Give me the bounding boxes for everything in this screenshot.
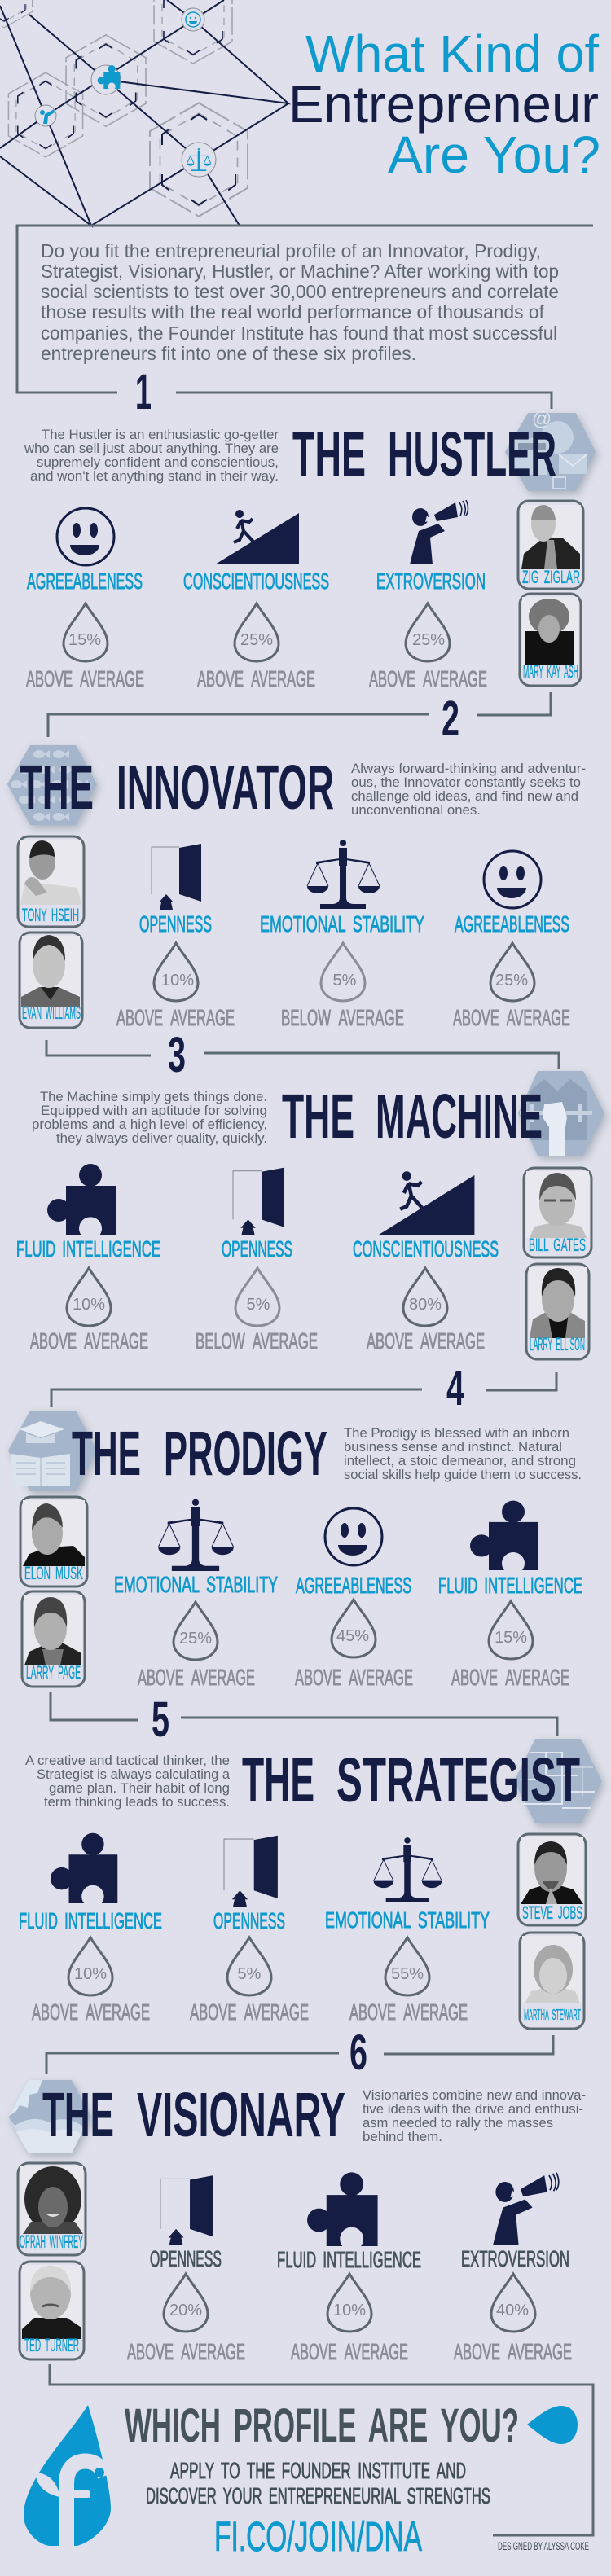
prodigy description: intellect, a stoic demeanor, and strong (344, 1453, 576, 1468)
strategist averages: ABOVE AVERAGE (190, 1999, 309, 2025)
connector 5 (51, 1692, 557, 1736)
number 4: 4 (446, 1360, 464, 1415)
strategist heading: THE (242, 1745, 314, 1815)
prodigy averages: ABOVE AVERAGE (295, 1665, 413, 1690)
hustler averages (26, 666, 487, 691)
innovator averages (116, 1005, 570, 1030)
number 3: 3 (168, 1027, 186, 1082)
visionary trait labels: FLUID INTELLIGENCE (277, 2247, 421, 2272)
machine description: problems and a high level of efficiency, (32, 1117, 267, 1132)
strategist percent drops: 10% (74, 1965, 107, 1983)
machine percent drops: 5% (247, 1296, 270, 1314)
icon: openness (224, 1836, 278, 1907)
machine averages: ABOVE AVERAGE (30, 1328, 148, 1354)
title: What Kind of (306, 24, 599, 83)
hustler percent drops: 25% (240, 631, 273, 649)
intro text: companies, the Founder Institute has found that most successful (41, 323, 557, 344)
hustler percent drops: 25% (412, 631, 445, 649)
intro text: Do you fit the entrepreneurial profile of an Innovator, Prodigy, (41, 240, 541, 261)
portrait: elon musk: ELON MUSK (24, 1563, 83, 1583)
visionary percent drops (164, 2274, 535, 2332)
strategist percent drops (68, 1937, 429, 1995)
machine averages: BELOW AVERAGE (196, 1328, 318, 1354)
hustler percent drops: 15% (68, 631, 101, 649)
visionary heading: VISIONARY (137, 2080, 345, 2150)
strategist averages: ABOVE AVERAGE (32, 1999, 150, 2025)
portrait: mary kay ash (520, 594, 581, 686)
hustler hexagon icon: @ (532, 408, 552, 430)
hustler averages: ABOVE AVERAGE (26, 666, 144, 691)
portrait: steve jobs (518, 1834, 586, 1925)
connector 3 (46, 1040, 559, 1069)
prodigy averages: ABOVE AVERAGE (138, 1665, 255, 1690)
visionary averages (127, 2339, 572, 2364)
icon: openness (233, 1168, 284, 1235)
prodigy trait labels (114, 1572, 582, 1598)
innovator hexagon icon (7, 745, 97, 825)
footer frame (50, 2364, 593, 2535)
icon: fluid intelligence (470, 1501, 538, 1570)
machine description: The Machine simply gets things done. (40, 1089, 267, 1104)
network graphic (0, 0, 288, 226)
icon: extroversion (410, 500, 468, 564)
prodigy percent drops: 45% (336, 1627, 369, 1645)
panel: the machine (16, 1071, 604, 1359)
prodigy percent drops (174, 1600, 533, 1660)
portrait: tony hseih (18, 836, 84, 927)
prodigy heading: PRODIGY (164, 1419, 327, 1489)
innovator averages: ABOVE AVERAGE (116, 1005, 235, 1030)
strategist percent drops: 5% (238, 1965, 262, 1983)
icon: conscientiousness (215, 510, 299, 564)
strategist description: A creative and tactical thinker, the (25, 1753, 230, 1768)
footer call to action (146, 2458, 490, 2508)
prodigy trait labels: AGREEABLENESS (296, 1573, 411, 1598)
hustler hexagon icon (505, 408, 596, 491)
strategist percent drops: 55% (391, 1965, 424, 1983)
title: Are You? (388, 125, 600, 184)
prodigy description (344, 1425, 582, 1482)
intro text: those results with the real world performance of thousands of (41, 301, 545, 323)
hustler description: supremely confident and conscientious, (37, 454, 279, 470)
portrait: tony hseih: TONY HSEIH (22, 905, 79, 925)
machine heading: THE (282, 1082, 354, 1152)
portrait: zig ziglar (518, 501, 583, 589)
icon: fluid intelligence (307, 2172, 378, 2246)
innovator heading: THE (20, 753, 94, 823)
visionary description: asm needed to rally the masses (363, 2115, 553, 2131)
prodigy percent drops: 25% (179, 1630, 212, 1648)
hustler averages: ABOVE AVERAGE (197, 666, 315, 691)
hustler trait labels: AGREEABLENESS (27, 568, 143, 594)
innovator averages: BELOW AVERAGE (281, 1005, 404, 1030)
machine percent drops: 10% (73, 1296, 105, 1314)
machine percent drops: 80% (409, 1296, 442, 1314)
visionary description: Visionaries combine new and innova- (363, 2087, 586, 2103)
strategist trait labels: FLUID INTELLIGENCE (19, 1908, 162, 1933)
icon: sideways drop (527, 2406, 578, 2444)
panel: the strategist (19, 1739, 602, 2029)
strategist trait labels: OPENNESS (213, 1908, 285, 1933)
icon: conscientiousness (379, 1171, 474, 1235)
hustler trait labels: CONSCIENTIOUSNESS (183, 568, 329, 594)
intro text (41, 240, 559, 364)
hustler description (24, 427, 279, 484)
icon: agreeableness (484, 851, 541, 908)
prodigy description: The Prodigy is blessed with an inborn (344, 1425, 569, 1441)
strategist description (25, 1753, 231, 1810)
hustler description: The Hustler is an enthusiastic go-getter (42, 427, 279, 442)
portrait: oprah winfrey (18, 2163, 86, 2255)
innovator percent drops: 10% (161, 972, 194, 990)
prodigy hexagon icon (8, 1411, 97, 1491)
innovator percent drops (154, 943, 534, 1001)
machine trait labels (16, 1236, 499, 1262)
prodigy percent drops: 15% (495, 1629, 527, 1647)
icon: emotional stability (307, 840, 380, 909)
panel: the visionary: OPRAH WINFREY (20, 2232, 83, 2252)
visionary description: behind them. (363, 2129, 442, 2144)
machine trait labels: CONSCIENTIOUSNESS (353, 1236, 499, 1262)
portrait: larry ellison (526, 1264, 589, 1359)
title: Entrepreneur (288, 75, 599, 134)
hustler averages: ABOVE AVERAGE (369, 666, 487, 691)
icon: agreeableness (325, 1508, 382, 1565)
visionary trait labels (150, 2246, 569, 2272)
strategist trait labels (19, 1907, 490, 1933)
portrait: evan williams (20, 933, 82, 1028)
title (288, 24, 600, 184)
machine percent drops (67, 1268, 447, 1326)
innovator trait labels: OPENNESS (139, 911, 212, 937)
visionary hexagon icon (8, 2080, 91, 2153)
portrait: ted turner (20, 2262, 84, 2359)
intro text: Strategist, Visionary, Hustler, or Machine? After working with top (41, 261, 559, 282)
innovator description: unconventional ones. (351, 802, 481, 818)
machine description (32, 1089, 267, 1146)
innovator trait labels (139, 911, 569, 937)
portrait: larry page: LARRY PAGE (26, 1662, 81, 1683)
number 6: 6 (349, 2025, 367, 2080)
visionary description (363, 2087, 586, 2144)
panel: the innovator (7, 745, 586, 1030)
prodigy description: business sense and instinct. Natural (344, 1439, 562, 1455)
visionary description: tive ideas with the drive and enthusi- (363, 2101, 583, 2117)
icon: extroversion (493, 2173, 559, 2245)
hustler heading: THE (292, 419, 366, 489)
panel: the visionary: TED TURNER (24, 2335, 79, 2355)
innovator description: Always forward-thinking and adventur- (351, 761, 586, 776)
portrait: martha stewart (520, 1933, 584, 2029)
innovator percent drops: 25% (495, 972, 528, 990)
icon: emotional stability (158, 1499, 234, 1571)
strategist description: game plan. Their habit of long (49, 1780, 230, 1796)
portrait: elon musk (20, 1497, 87, 1586)
hustler percent drops (64, 603, 450, 661)
machine averages (30, 1328, 485, 1354)
innovator description (351, 761, 586, 818)
visionary percent drops: 20% (169, 2302, 202, 2319)
prodigy description: social skills help guide them to success. (344, 1467, 582, 1482)
icon: fluid intelligence (47, 1164, 116, 1235)
visionary heading: THE (42, 2080, 114, 2150)
icon: openness (152, 844, 201, 910)
machine averages: ABOVE AVERAGE (367, 1328, 485, 1354)
portrait: larry page (22, 1591, 85, 1687)
icon: founder institute logo (24, 2405, 111, 2551)
strategist description: term thinking leads to success. (44, 1794, 230, 1810)
portrait: bill gates (524, 1168, 591, 1257)
machine description: they always deliver quality, quickly. (56, 1130, 267, 1146)
panel: the visionary (8, 2080, 586, 2364)
intro frame and connector 1 (17, 226, 593, 409)
panel: the prodigy (8, 1411, 582, 1690)
hustler description: who can sell just about anything. They are (24, 441, 279, 456)
strategist averages (32, 1999, 468, 2025)
hustler description: and won't let anything stand in their way. (30, 468, 279, 484)
connector 6 (46, 2035, 553, 2074)
innovator heading: INNOVATOR (116, 753, 334, 823)
intro text: social scientists to test over 30,000 entrepreneurs and correlate (41, 281, 559, 302)
visionary averages: ABOVE AVERAGE (291, 2339, 408, 2364)
icon: openness (160, 2175, 213, 2245)
machine description: Equipped with an aptitude for solving (41, 1103, 267, 1118)
intro text: entrepreneurs fit into one of these six profiles. (41, 343, 416, 364)
hustler trait labels (27, 568, 486, 594)
innovator percent drops: 5% (333, 972, 357, 990)
machine trait labels: OPENNESS (222, 1236, 292, 1262)
visionary percent drops: 40% (496, 2302, 529, 2319)
visionary trait labels: OPENNESS (150, 2246, 222, 2271)
visionary percent drops: 10% (333, 2302, 366, 2319)
prodigy trait labels: EMOTIONAL STABILITY (114, 1572, 278, 1597)
connector 2 (48, 692, 551, 737)
innovator trait labels: EMOTIONAL STABILITY (260, 911, 424, 937)
panel: the innovator: EVAN WILLIAMS (22, 1003, 81, 1023)
strategist averages: ABOVE AVERAGE (349, 1999, 468, 2025)
hustler trait labels: EXTROVERSION (376, 568, 486, 594)
machine trait labels: FLUID INTELLIGENCE (16, 1236, 160, 1262)
icon: emotional stability (374, 1837, 442, 1902)
icon: agreeableness (57, 508, 114, 565)
machine hexagon icon (518, 1071, 604, 1156)
prodigy averages (138, 1665, 569, 1690)
number 2: 2 (442, 691, 459, 746)
innovator description: challenge old ideas, and find new and (351, 788, 578, 804)
visionary averages: ABOVE AVERAGE (127, 2339, 245, 2364)
connector 4 (51, 1372, 556, 1407)
strategist hexagon icon (514, 1739, 602, 1823)
prodigy heading: THE (72, 1419, 141, 1489)
strategist description: Strategist is always calculating a (37, 1766, 231, 1782)
icon: fluid intelligence (51, 1833, 117, 1903)
number 1: 1 (135, 364, 152, 419)
panel: the hustler (24, 408, 596, 691)
strategist trait labels: EMOTIONAL STABILITY (325, 1907, 490, 1933)
number 5: 5 (152, 1692, 169, 1747)
innovator description: ous, the Innovator constantly seeks to (351, 775, 581, 790)
footer url: FI.CO/JOIN/DNA (214, 2513, 422, 2560)
